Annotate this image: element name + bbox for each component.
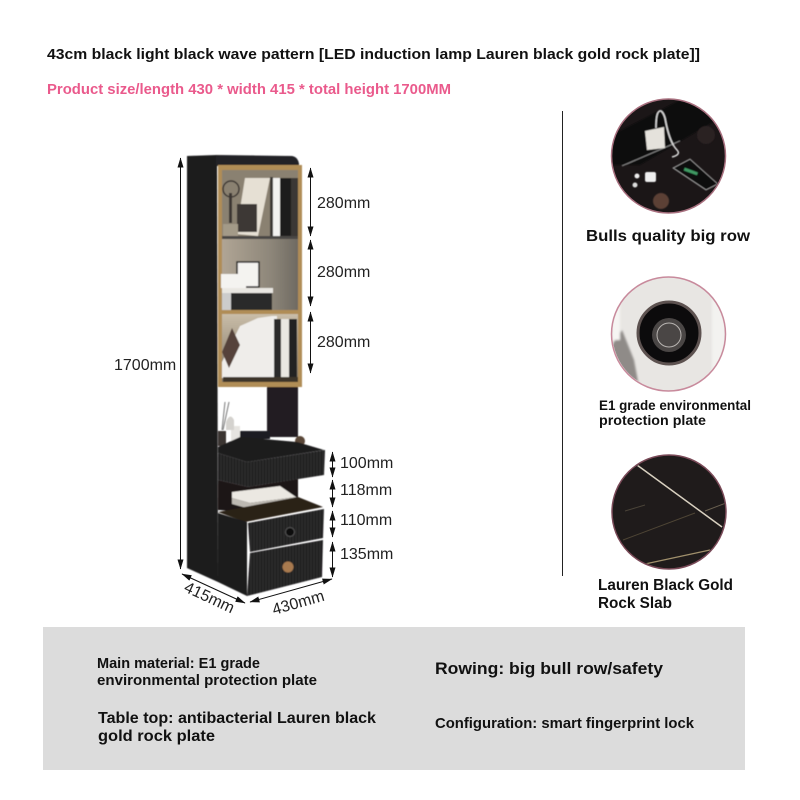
dimension: shelf heights: 280mm (317, 334, 370, 351)
shelf 2 contents (222, 239, 298, 310)
spec: configuration: Configuration: smart fingerprint lock (435, 715, 695, 732)
spec: main material: Main material: E1 grade (97, 656, 260, 672)
dimension: footprint: 415mm (181, 579, 237, 617)
dimension: lower heights (332, 452, 393, 577)
dimension: footprint: 430mm (270, 588, 326, 619)
spec: table top: gold rock plate (98, 728, 215, 745)
spec: rowing: Rowing: big bull row/safety (435, 659, 664, 678)
dimension: shelf heights: 280mm (317, 195, 370, 212)
upper shelf unit (218, 165, 302, 387)
product illustration: cabinet (187, 155, 325, 596)
dimension: lower heights: 110mm (340, 512, 392, 529)
feature label: E1 grade: E1 grade environmental (599, 398, 751, 413)
shelf 1 contents (222, 170, 298, 236)
shelf divider 2 (220, 310, 300, 314)
dimension: lower heights: 135mm (340, 546, 393, 563)
dimension: footprint (181, 574, 332, 619)
feature photo: fingerprint lock (612, 270, 726, 400)
accessories on tabletop (218, 402, 305, 446)
feature label: rock slab: Lauren Black Gold (598, 577, 733, 594)
product size line: Product size/length 430 * width 415 * total height 1700MM (47, 81, 451, 98)
dimension: shelf heights: 280mm (317, 264, 370, 281)
specification panel (43, 627, 745, 770)
feature photo: USB charging (612, 99, 730, 213)
right support column (267, 387, 298, 437)
feature label: bulls quality: Bulls quality big row (586, 228, 751, 245)
shelf divider 1 (222, 236, 298, 239)
top bar (216, 155, 299, 166)
feature label: rock slab: Rock Slab (598, 595, 672, 612)
dimension: shelf heights (310, 168, 370, 373)
spec: main material: environmental protection plate (97, 673, 317, 689)
feature photo: rock slab (612, 455, 726, 569)
upper drawer top and front (218, 437, 324, 462)
base cabinet with two drawers (218, 497, 324, 596)
spec: table top: Table top: antibacterial Lauren black (98, 710, 376, 727)
drawer knobs (286, 528, 294, 536)
vertical divider (562, 111, 564, 576)
feature label: E1 grade: protection plate (599, 413, 707, 428)
title: 43cm black light black wave pattern [LED induction lamp Lauren black gold rock plate]] (47, 47, 700, 63)
dimension: total height: 1700mm (114, 357, 176, 374)
left column (187, 155, 218, 582)
open niche with books (218, 479, 298, 511)
shelf 3 contents (222, 314, 298, 382)
dimension: lower heights: 118mm (340, 482, 392, 499)
dimension: lower heights: 100mm (340, 455, 393, 472)
